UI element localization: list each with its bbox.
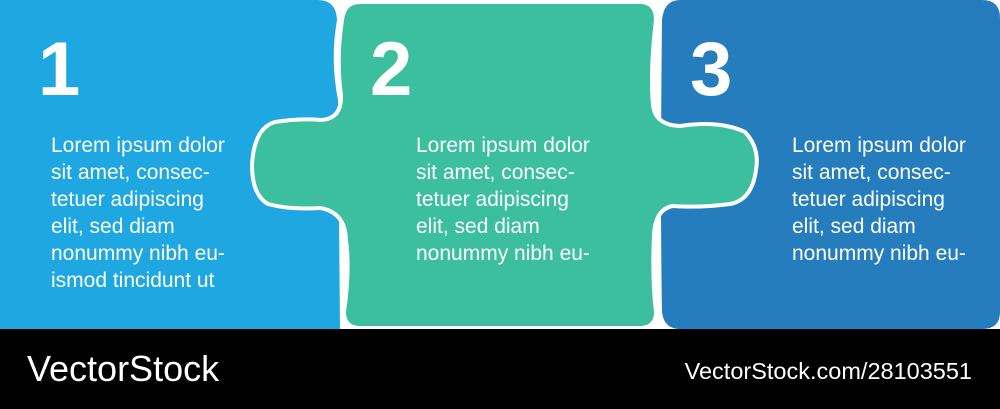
text block 1: sit amet, consec- [51,161,210,184]
number 1: 1 [38,27,80,112]
number 3: 3 [690,27,732,112]
text block 3: elit, sed diam [792,215,916,238]
panel: piece 1 [0,0,340,330]
text block 3: nonummy nibh eu- [792,242,966,265]
text block 2: Lorem ipsum dolor [416,134,590,157]
text block 2: tetuer adipiscing [416,188,569,211]
text block 1: elit, sed diam [51,215,175,238]
text block 2: elit, sed diam [416,215,540,238]
text block 1: Lorem ipsum dolor [51,134,225,157]
text block 1: nonummy nibh eu- [51,242,225,265]
text block 3: sit amet, consec- [792,161,951,184]
text block 2: sit amet, consec- [416,161,575,184]
text block 3: tetuer adipiscing [792,188,945,211]
footer url: VectorStock.com/28103551 [685,358,972,384]
panel: piece 3 [661,0,1000,329]
text block 1: ismod tincidunt ut [51,269,215,292]
text block 2: nonummy nibh eu- [416,242,590,265]
number 2: 2 [370,27,412,112]
footer logo: VectorStock [27,348,220,389]
footer bar [0,329,1000,409]
text block 3: Lorem ipsum dolor [792,134,966,157]
panel: piece 2 [252,2,757,328]
text block 1: tetuer adipiscing [51,188,204,211]
